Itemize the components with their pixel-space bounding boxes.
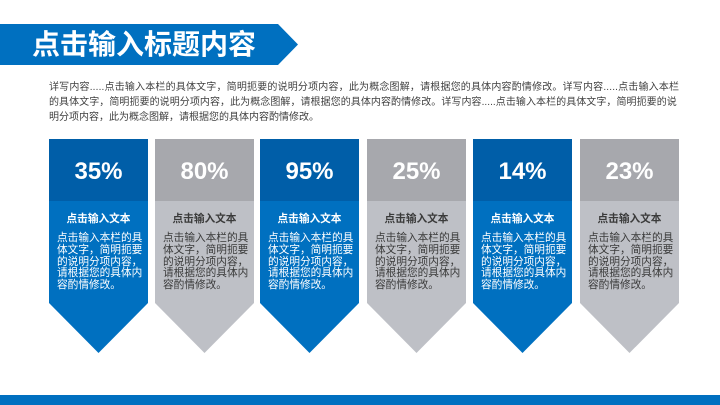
description: 点击输入本栏的具 [268, 232, 353, 244]
panel: 14% [473, 139, 572, 353]
percentage: 25%: 25% [392, 158, 441, 185]
description: 的说明分项内容， [268, 256, 353, 268]
footer bar [0, 395, 720, 405]
description: 请根据您的具体内 [588, 267, 673, 279]
description [481, 232, 566, 290]
description: 的说明分项内容， [57, 256, 142, 268]
description: 容酌情修改。 [268, 279, 332, 291]
title banner [0, 24, 298, 65]
description: 请根据您的具体内 [57, 267, 142, 279]
description: 点击输入本栏的具 [375, 232, 460, 244]
percentage: 35%: 35% [74, 158, 123, 185]
intro text block: 详写内容.....点击输入本栏的具体文字，简明扼要的说明分项内容，此为概念图解，请根据您的具体内容酌情修改。详写内容.....点击输入本栏 [49, 82, 679, 93]
arrow body: 25% [367, 201, 466, 353]
subheading: 点击输入文本 [491, 213, 554, 225]
panel: 35% [49, 139, 148, 353]
percentage: 14% [473, 139, 572, 201]
percentage: 35% [49, 139, 148, 201]
description: 点击输入本栏的具 [57, 232, 142, 244]
description: 的说明分项内容， [481, 256, 566, 268]
description [163, 232, 248, 290]
description: 的说明分项内容， [375, 256, 460, 268]
percentage: 23%: 23% [605, 158, 654, 185]
description: 点击输入本栏的具 [163, 232, 248, 244]
description: 容酌情修改。 [375, 279, 439, 291]
percentage: 25% [367, 139, 466, 201]
arrow body: 35% [49, 201, 148, 353]
percentage: 80%: 80% [180, 158, 229, 185]
description: 的说明分项内容， [163, 256, 248, 268]
description: 体文字，简明扼要 [163, 244, 248, 256]
description: 请根据您的具体内 [163, 267, 248, 279]
description [588, 232, 673, 290]
subheading: 点击输入文本 [385, 213, 448, 225]
description: 体文字，简明扼要 [481, 244, 566, 256]
description: 点击输入本栏的具 [481, 232, 566, 244]
description: 点击输入本栏的具 [588, 232, 673, 244]
arrow body: 80% [155, 201, 254, 353]
intro text block: 的具体文字，简明扼要的说明分项内容，此为概念图解，请根据您的具体内容酌情修改。详写内容.....点击输入本栏的具体文字，简明扼要的说 [49, 97, 677, 108]
panel: 80% [155, 139, 254, 353]
percentage: 80% [155, 139, 254, 201]
description [268, 232, 353, 290]
arrow body: 95% [260, 201, 359, 353]
arrow body: 23% [580, 201, 679, 353]
percentage: 14%: 14% [498, 158, 547, 185]
intro text block [49, 81, 679, 123]
description: 容酌情修改。 [588, 279, 652, 291]
subheading: 点击输入文本 [278, 213, 341, 225]
description: 体文字，简明扼要 [588, 244, 673, 256]
description: 请根据您的具体内 [481, 267, 566, 279]
title: 点击输入标题内容 [32, 29, 256, 60]
percentage: 95% [260, 139, 359, 201]
subheading: 点击输入文本 [67, 213, 130, 225]
subheading: 点击输入文本 [173, 213, 236, 225]
intro text block: 明分项内容，此为概念图解，请根据您的具体内容酌情修改。 [49, 112, 319, 123]
description: 的说明分项内容， [588, 256, 673, 268]
subheading: 点击输入文本 [598, 213, 661, 225]
description: 体文字，简明扼要 [375, 244, 460, 256]
percentage: 23% [580, 139, 679, 201]
description: 请根据您的具体内 [268, 267, 353, 279]
percentage: 95%: 95% [285, 158, 334, 185]
description: 容酌情修改。 [57, 279, 121, 291]
description: 容酌情修改。 [163, 279, 227, 291]
panel: 23% [580, 139, 679, 353]
description [57, 232, 142, 290]
description: 体文字，简明扼要 [57, 244, 142, 256]
panel: 25% [367, 139, 466, 353]
description [375, 232, 460, 290]
description: 体文字，简明扼要 [268, 244, 353, 256]
description: 请根据您的具体内 [375, 267, 460, 279]
arrow body: 14% [473, 201, 572, 353]
description: 容酌情修改。 [481, 279, 545, 291]
panel: 95% [260, 139, 359, 353]
